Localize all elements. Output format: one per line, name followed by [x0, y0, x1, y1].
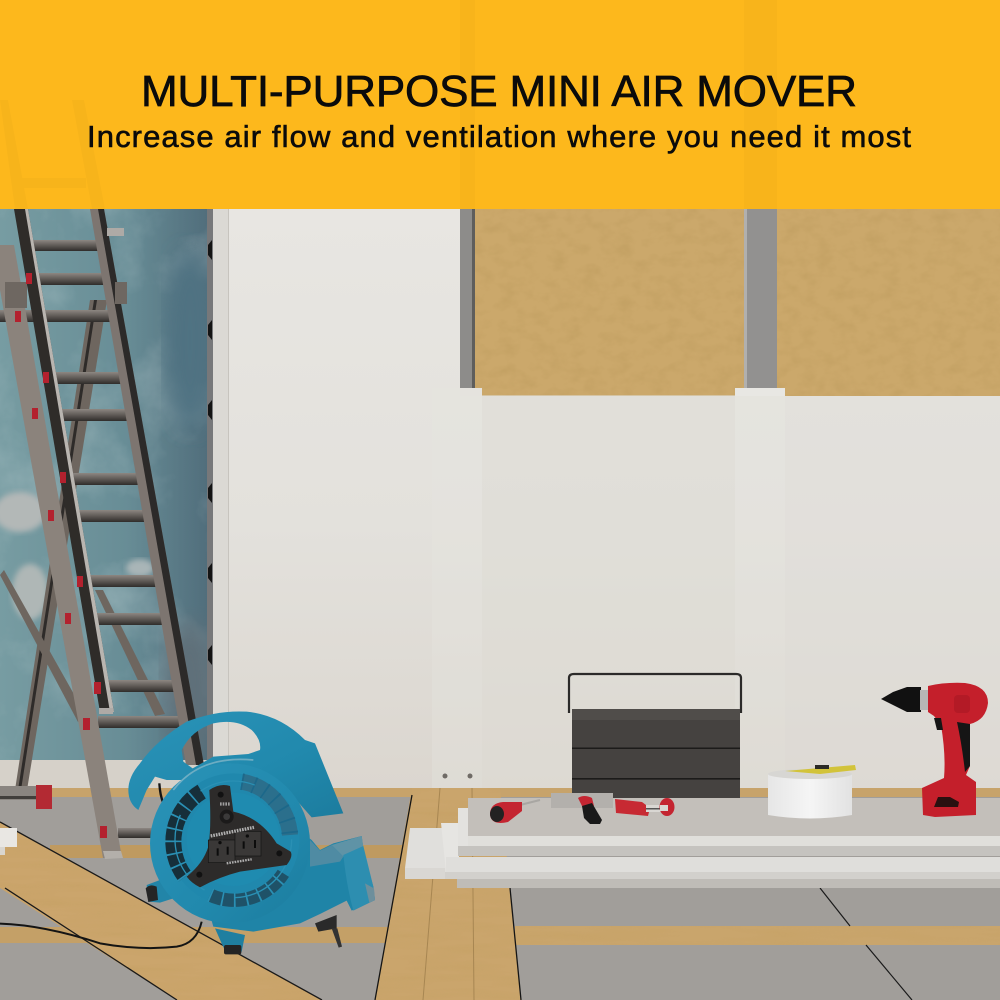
intake vents [173, 781, 292, 900]
feet [146, 880, 342, 954]
electrical outlets [208, 831, 261, 863]
faint ladder behind banner [0, 0, 777, 209]
floor [0, 788, 1000, 1000]
diagonal wood planks [0, 820, 325, 1000]
ladder rails [90, 209, 204, 765]
outlet nozzle [200, 827, 375, 932]
screwdriver 2 [578, 796, 602, 824]
stack of boards [405, 798, 1000, 888]
handle and hood [128, 711, 343, 817]
cordless drill [881, 683, 988, 817]
wall seams [432, 388, 1000, 790]
rear cord [159, 783, 163, 803]
ladder red tabs [15, 273, 107, 838]
small tools on boards [490, 793, 674, 824]
power cord [0, 922, 202, 948]
insulation boards: OSB panels [475, 200, 1000, 396]
tape roll [768, 765, 856, 818]
screwdriver 1 [490, 800, 540, 823]
air mover [0, 711, 375, 954]
title banner [0, 0, 1000, 209]
central wood planks [370, 788, 525, 1000]
steel studs [460, 200, 777, 396]
utility knife [785, 765, 856, 774]
round housing [150, 763, 310, 923]
pliers [615, 798, 674, 816]
wall panels: plasterboard [0, 200, 1000, 790]
ladder rungs [0, 240, 188, 838]
metal bracket [551, 793, 613, 808]
ladder back legs [0, 300, 165, 809]
toolbox [569, 674, 741, 799]
back wall: teal plaster [0, 200, 216, 762]
ladder [0, 209, 204, 859]
black control plate [187, 785, 291, 887]
subheading: Increase air flow and ventilation where you need it most [87, 119, 911, 154]
heading: MULTI-PURPOSE MINI AIR MOVER [141, 67, 857, 116]
